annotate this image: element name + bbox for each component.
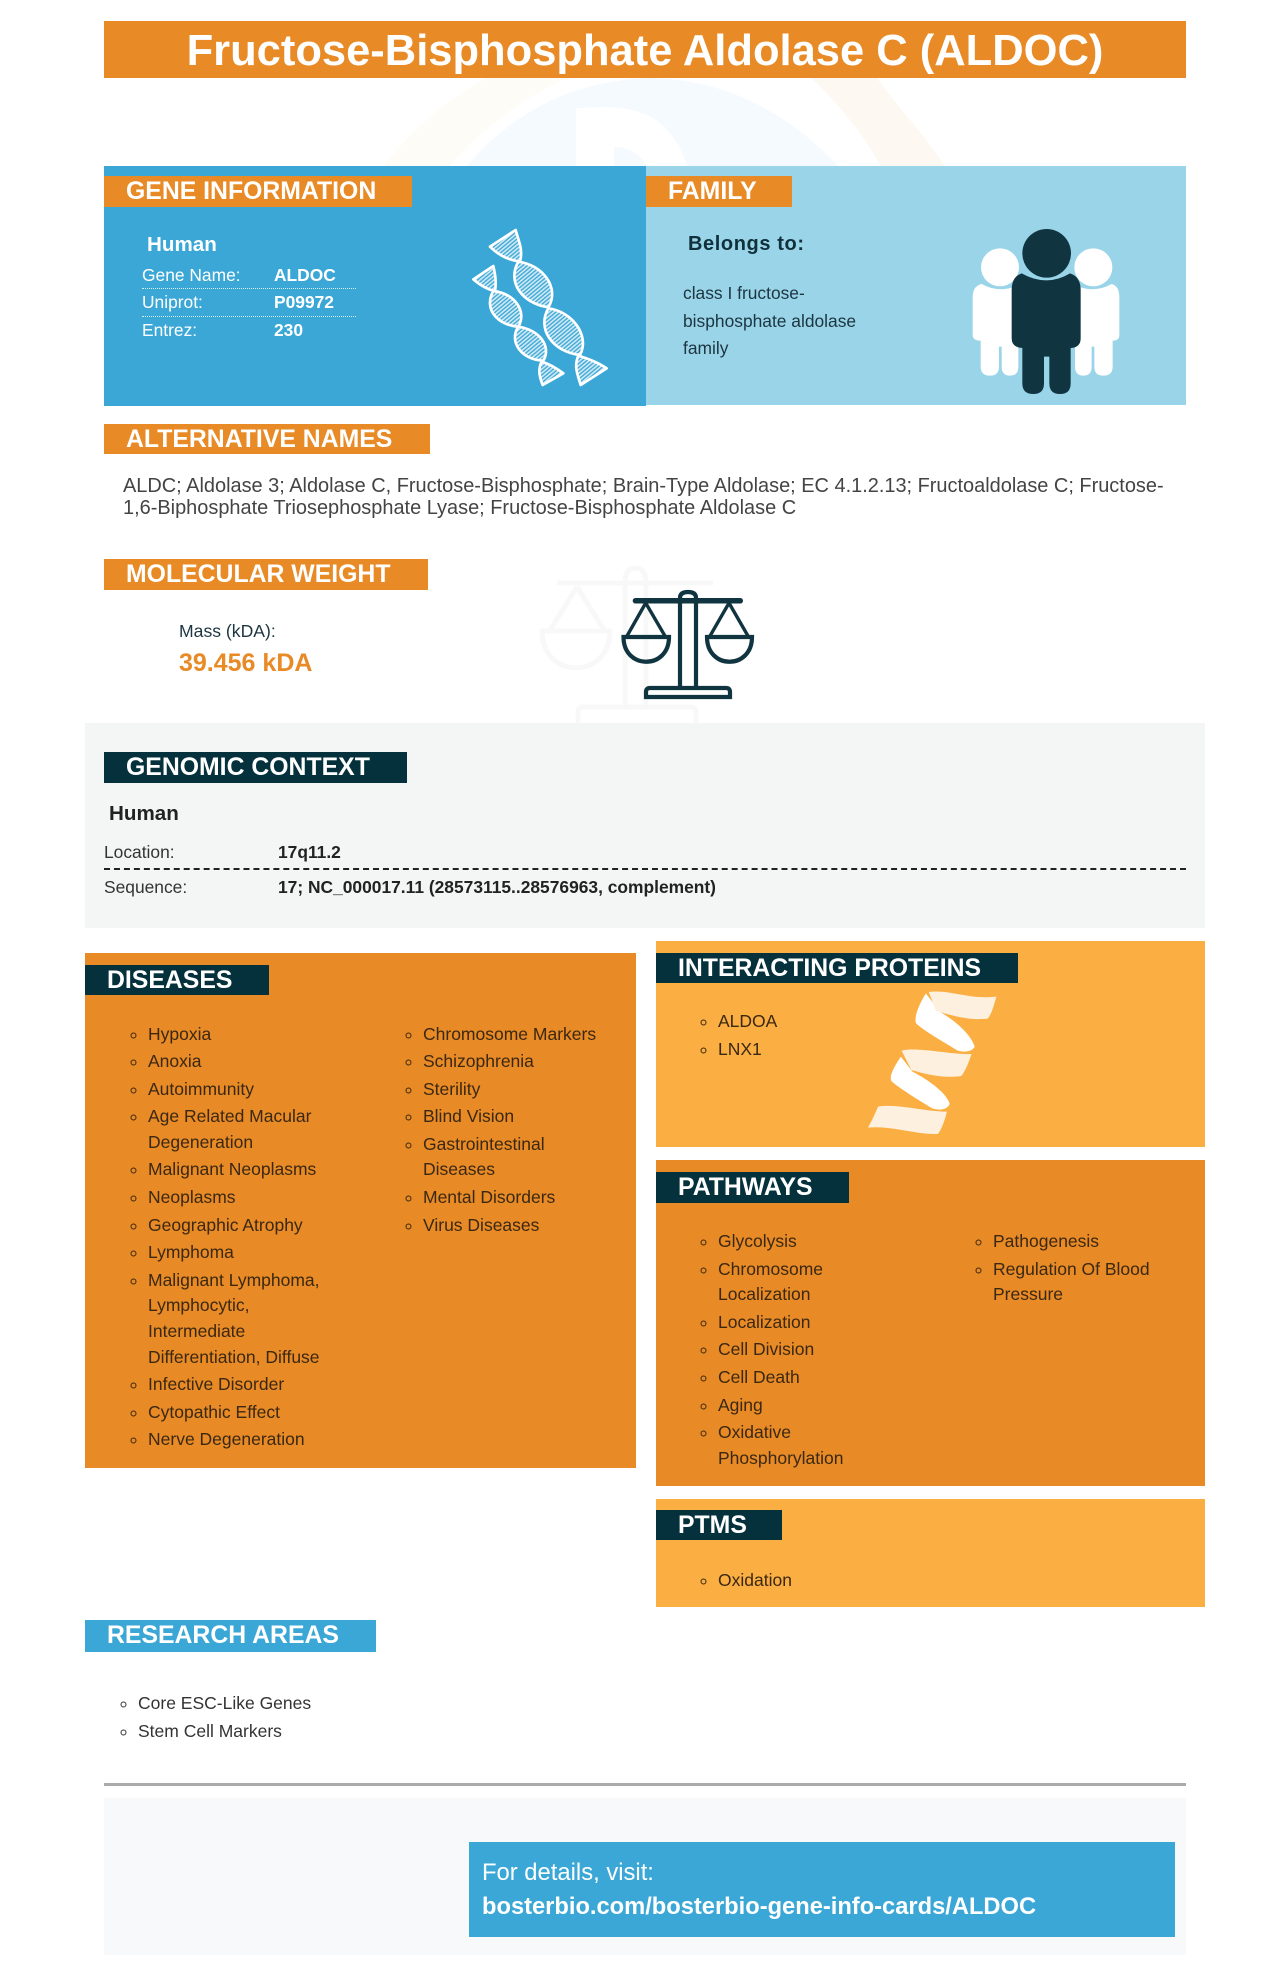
panel: genomic context — [85, 723, 1205, 928]
location row: Location: — [104, 842, 175, 862]
list: diseases column 1: Cytopathic Effect — [148, 1402, 280, 1422]
list: diseases column 1: Malignant Lymphoma, Lymphocytic, Intermediate Differentiation, Diffuse — [148, 1270, 320, 1367]
heading: diseases: DISEASES — [107, 967, 232, 994]
list: diseases column 1: Hypoxia — [148, 1024, 211, 1044]
heading: interacting proteins: INTERACTING PROTEINS — [678, 955, 981, 982]
mass label: Mass (kDA): — [179, 621, 276, 641]
panel: pathways — [656, 1160, 1205, 1486]
list: pathways column 1: Chromosome Localization — [718, 1259, 823, 1304]
panel: gene information — [104, 166, 646, 406]
list: pathways column 1: Glycolysis — [718, 1231, 797, 1251]
list: diseases column 2: Blind Vision — [423, 1106, 514, 1126]
list: diseases column 1: Infective Disorder — [148, 1374, 284, 1394]
list: pathways column 1: Cell Division — [718, 1339, 814, 1359]
gene fact rows: 230 — [274, 320, 303, 340]
gene fact rows — [142, 265, 356, 340]
title banner: Fructose-Bisphosphate Aldolase C (ALDOC) — [187, 27, 1103, 75]
list: diseases column 1: Anoxia — [148, 1051, 202, 1071]
list: PTMs: Oxidation — [718, 1570, 792, 1590]
heading: pathways: PATHWAYS — [678, 1174, 813, 1201]
list: diseases column 1: Age Related Macular Degeneration — [148, 1106, 311, 1152]
list: diseases column 1: Geographic Atrophy — [148, 1215, 303, 1235]
list: diseases column 2: Schizophrenia — [423, 1051, 534, 1071]
list: pathways column 2: Regulation Of Blood Pressure — [993, 1259, 1150, 1304]
heading: research areas: RESEARCH AREAS — [107, 1622, 339, 1649]
heading: diseases — [85, 965, 269, 995]
heading: pathways — [656, 1172, 849, 1203]
list: pathways column 1: Localization — [718, 1312, 810, 1332]
list: research areas: Stem Cell Markers — [138, 1721, 282, 1741]
callout: details link — [469, 1842, 1175, 1937]
list: interacting proteins: LNX1 — [718, 1039, 762, 1059]
heading: molecular weight: MOLECULAR WEIGHT — [126, 561, 390, 588]
sequence value: 17; NC_000017.11 (28573115..28576963, complement) — [278, 877, 716, 897]
list: diseases column 1: Malignant Neoplasms — [148, 1159, 316, 1179]
callout text: for details: For details, visit: — [482, 1859, 654, 1886]
icon: people group — [972, 229, 1120, 394]
heading: PTMs: PTMS — [678, 1512, 747, 1539]
gene fact rows: P09972 — [274, 292, 334, 312]
list: pathways column 2 — [976, 1231, 1150, 1304]
list: pathways column 1 — [700, 1231, 844, 1468]
list: pathways column 1: Cell Death — [718, 1367, 800, 1387]
mass value: 39.456 kDA — [179, 649, 312, 677]
list: interacting proteins — [700, 1011, 778, 1059]
panel: interacting proteins — [656, 941, 1205, 1147]
list: diseases column 2: Mental Disorders — [423, 1187, 555, 1207]
heading: family: FAMILY — [668, 178, 757, 205]
list: research areas: Core ESC-Like Genes — [138, 1693, 311, 1713]
heading: alternative names: ALTERNATIVE NAMES — [126, 426, 392, 453]
list: diseases column 1: Neoplasms — [148, 1187, 236, 1207]
list: diseases column 2: Sterility — [423, 1079, 480, 1099]
heading: research areas — [85, 1620, 376, 1652]
list: pathways column 2: Pathogenesis — [993, 1231, 1099, 1251]
list: diseases column 1: Nerve Degeneration — [148, 1429, 305, 1449]
list: diseases column 1: Lymphoma — [148, 1242, 234, 1262]
panel: diseases — [85, 953, 636, 1468]
list: diseases column 2 — [406, 1024, 596, 1235]
location value: 17q11.2 — [278, 842, 341, 862]
list: research areas — [120, 1693, 311, 1741]
sequence row: Sequence: — [104, 877, 187, 897]
list: interacting proteins: ALDOA — [718, 1011, 777, 1031]
heading: PTMs — [656, 1510, 782, 1540]
list: pathways column 1: Oxidative Phosphorylation — [718, 1422, 844, 1468]
belongs to label: Belongs to: — [688, 233, 805, 255]
list: diseases column 2: Chromosome Markers — [423, 1024, 596, 1044]
list: diseases column 2: Gastrointestinal Diseases — [423, 1134, 545, 1179]
list: diseases column 1 — [130, 1024, 320, 1449]
heading: genomic context: GENOMIC CONTEXT — [126, 754, 370, 781]
panel: family — [646, 166, 1186, 405]
species label: Human — [109, 802, 179, 825]
family description: bisphosphate aldolase — [683, 310, 856, 330]
icon: balance scale — [621, 590, 754, 700]
icon: DNA helix — [472, 228, 608, 386]
species label: Human — [147, 233, 217, 256]
heading: gene information: GENE INFORMATION — [126, 178, 376, 205]
list: diseases column 1: Autoimmunity — [148, 1079, 254, 1099]
watermark: faint logo arcs and ghost scale — [384, 78, 945, 166]
panel: footer — [104, 1798, 1186, 1955]
family description — [683, 283, 856, 358]
family description: class I fructose- — [683, 283, 805, 303]
gene fact rows: Entrez: — [142, 320, 197, 340]
icon: protein ribbon — [868, 992, 996, 1134]
list: pathways column 1: Aging — [718, 1395, 763, 1415]
gene fact rows: Uniprot: — [142, 292, 203, 312]
gene fact rows: ALDOC — [274, 265, 336, 285]
heading: family — [646, 176, 792, 207]
list: diseases column 2: Virus Diseases — [423, 1215, 539, 1235]
panel: PTMs — [656, 1499, 1205, 1607]
family description: family — [683, 338, 728, 358]
gene fact rows: Gene Name: — [142, 265, 241, 285]
callout text: url: bosterbio.com/bosterbio-gene-info-cards/ALDOC — [482, 1894, 1036, 1920]
alternative names text: ALDC; Aldolase 3; Aldolase C, Fructose-Bisphosphate; Brain-Type Aldolase; EC 4.1.2.13; Fructoaldolase C; Fructose-1,6-Biphosphate Triosephosphate Lyase; Fructose-Bisphosphate Aldolase C — [123, 475, 1164, 519]
